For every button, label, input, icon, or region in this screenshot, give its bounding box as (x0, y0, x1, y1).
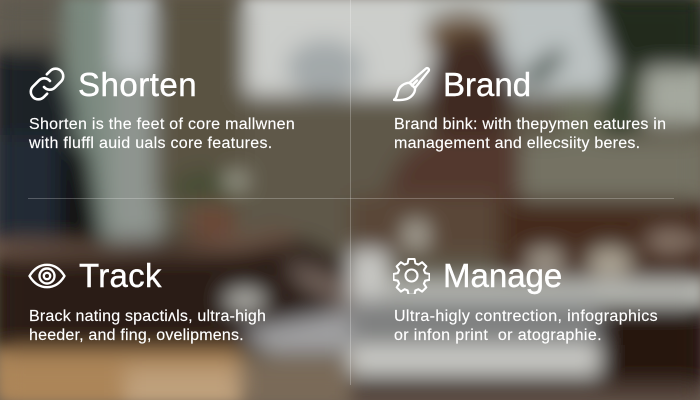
text: Brand description (394, 116, 666, 152)
icon: gear (393, 258, 430, 294)
icon: eye (28, 264, 66, 288)
heading: Shorten: Shorten (78, 66, 197, 103)
text: Brand description: management and ellecsiity beres. (394, 135, 640, 152)
heading: Track: Track (79, 257, 162, 294)
grid divider: horizontal (28, 198, 674, 199)
text: Shorten description: with fluffl auid uals core features. (29, 135, 273, 152)
panel: Track (28, 257, 266, 344)
grid divider: vertical (350, 0, 351, 385)
text: Shorten description (28, 116, 295, 152)
text: Track description (29, 308, 266, 344)
heading: Brand: Brand (443, 66, 531, 103)
panel: Shorten (28, 66, 295, 152)
text: Track description: Brack nating spactiʌls, ultra-high (29, 308, 266, 325)
heading: Manage: Manage (443, 257, 562, 294)
text: Manage description: or infon print or atographie. (394, 327, 602, 344)
text: Track description: heeder, and fing, ovelipmens. (29, 327, 244, 344)
icon: paint brush (393, 66, 430, 102)
text: Manage description (394, 308, 658, 344)
text: Manage description: Ultra-higly contrection, infographics (394, 308, 658, 325)
text: Brand description: Brand bink: with thepymen eatures in (394, 116, 666, 133)
icon: chain link (30, 67, 64, 101)
panel: Manage (393, 257, 658, 344)
text: Shorten description: Shorten is the feet of core mallwnen (29, 116, 295, 133)
panel: Brand (393, 66, 666, 152)
